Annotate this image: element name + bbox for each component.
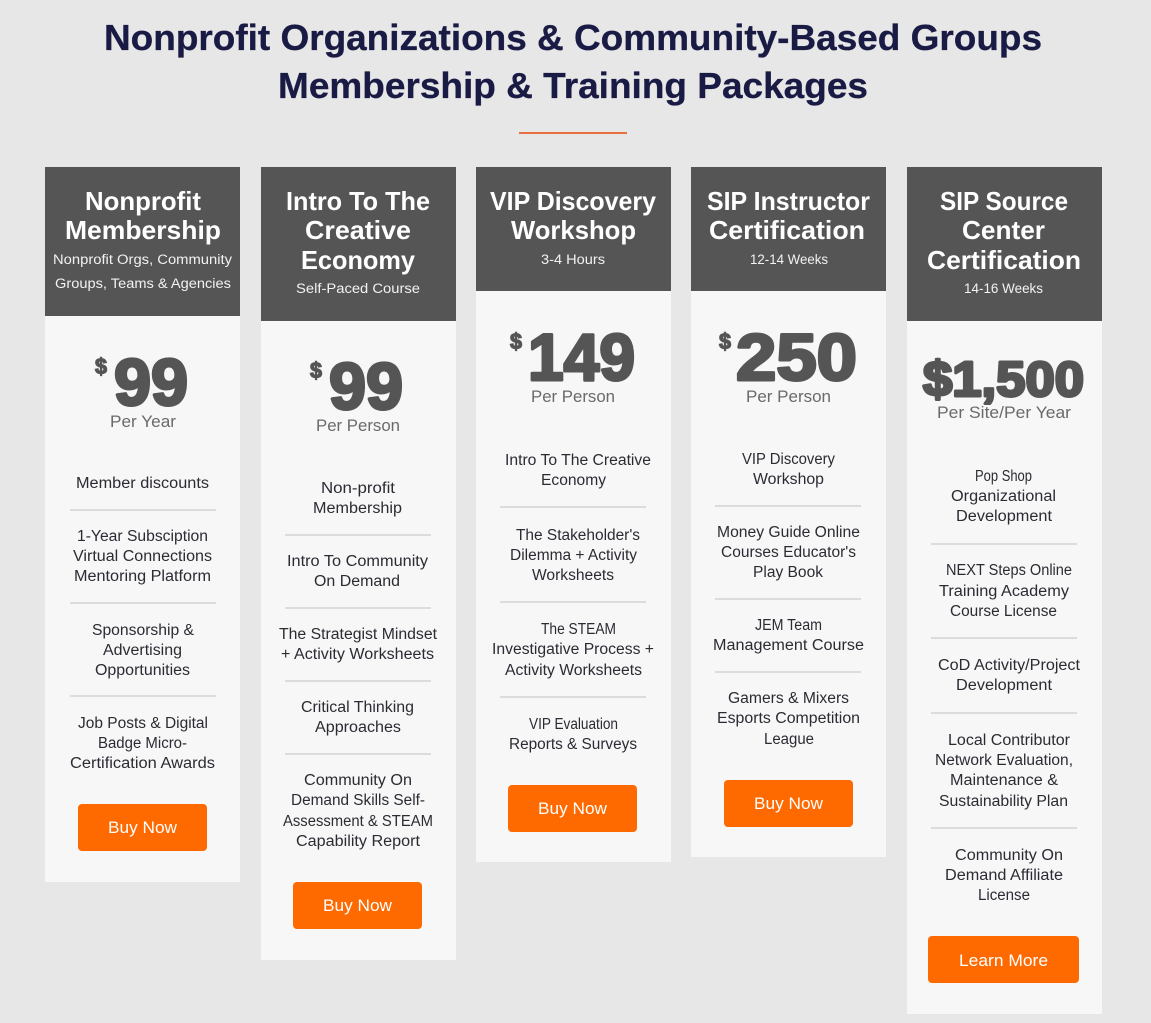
feature list: The Strategist Mindset [279,626,438,643]
feature list: Non-profit [321,480,396,497]
feature list: Local Contributor [948,732,1070,749]
feature list: Certification Awards [70,755,215,772]
header: VIP Discovery Workshop [476,167,671,291]
price: $99 per year: 99 [114,345,188,419]
panel: VIP Discovery Workshop [476,167,671,862]
header: SIP Instructor Certification: Certification [709,215,865,245]
title: Nonprofit Organizations & Community-Based Groups [104,17,1042,58]
feature list: CoD Activity/Project [938,657,1081,674]
header: SIP Instructor Certification [691,167,886,291]
feature list: Investigative Process + [492,641,654,658]
feature list: VIP Evaluation [529,716,618,733]
header: Intro To The Creative Economy [261,167,456,321]
header: SIP Source Center Certification: SIP Source [940,186,1068,216]
header: SIP Source Center Certification [907,167,1102,321]
header: Intro To The Creative Economy: Creative [305,215,411,245]
header: Nonprofit Membership: Groups, Teams & Agencies [55,276,231,291]
title: Membership & Training Packages [278,65,868,106]
feature list: Community On [955,847,1063,864]
price: $99 per person: 99 [329,349,403,423]
price: $149 per person: $ [510,329,522,354]
header: SIP Source Center Certification: 14-16 Weeks [964,281,1043,296]
feature list: Badge Micro- [98,735,187,752]
feature list: Dilemma + Activity [510,547,637,564]
header: SIP Instructor Certification: SIP Instructor [707,186,870,216]
feature list: Workshop [753,471,824,488]
header: Intro To The Creative Economy: Intro To The [286,186,430,216]
button: Learn More [928,936,1079,983]
panel: SIP Source Center Certification [907,167,1102,1014]
feature list: Assessment & STEAM [283,813,433,830]
feature list: Membership [313,500,402,517]
feature list: Job Posts & Digital [78,715,208,732]
feature list: NEXT Steps Online [946,562,1072,579]
header: SIP Instructor Certification: 12-14 Weeks [750,252,828,267]
feature list: Maintenance & [950,772,1059,789]
feature list: Play Book [753,564,823,581]
feature list: Organizational [951,488,1056,505]
feature list: Advertising [103,642,182,659]
price: $149 per person: Per Person [531,387,615,406]
price: $99 per person [310,349,403,435]
feature list: Intro To Community [287,553,428,570]
title [104,17,1042,106]
feature list: Intro To The Creative [505,452,651,469]
feature list: Critical Thinking [301,699,414,716]
feature list: The Stakeholder's [516,527,640,544]
feature list: Development [956,508,1053,525]
button: Buy Now: Buy Now [754,794,824,813]
button: Learn More: Learn More [959,951,1048,970]
header: Intro To The Creative Economy: Self-Paced Course [296,281,420,296]
feature list: Worksheets [532,567,614,584]
feature list [713,451,864,748]
button: Buy Now [724,780,853,827]
feature list: Reports & Surveys [509,736,637,753]
panel: SIP Instructor Certification [691,167,886,857]
header: Nonprofit Membership: Nonprofit [85,186,201,216]
feature list: Management Course [713,637,864,654]
feature list: Mentoring Platform [74,568,211,585]
feature list: Courses Educator's [721,544,856,561]
feature list: Pop Shop [975,468,1032,485]
header: VIP Discovery Workshop: VIP Discovery [490,186,657,216]
feature list: Network Evaluation, [935,752,1073,769]
feature list: + Activity Worksheets [281,646,434,663]
price: $99 per year: $ [95,354,107,379]
feature list: Esports Competition [717,710,860,727]
feature list: Capability Report [296,833,421,850]
price: $99 per year: Per Year [110,412,176,431]
button: Buy Now [293,882,422,929]
feature list: Gamers & Mixers [728,690,849,707]
feature list [492,452,654,753]
button: Buy Now: Buy Now [538,799,608,818]
feature list: Opportunities [95,662,190,679]
feature list: Approaches [315,719,401,736]
header: Nonprofit Membership [45,167,240,316]
price: $149 per person: 149 [528,320,635,394]
feature list: Demand Skills Self- [291,792,425,809]
feature list: Sponsorship & [92,622,195,639]
header: VIP Discovery Workshop: 3-4 Hours [541,252,605,267]
price: $250 per person: 250 [736,320,857,394]
header: Nonprofit Membership: Membership [65,215,221,245]
feature list: League [764,731,814,748]
feature list [931,468,1081,904]
price: $99 per person: Per Person [316,416,400,435]
feature list: Member discounts [76,475,209,492]
price: $250 per person: $ [719,329,731,354]
feature list: Demand Affiliate [945,867,1063,884]
feature list: On Demand [314,573,400,590]
header: SIP Source Center Certification: Certification [927,245,1081,275]
button: Buy Now: Buy Now [323,896,393,915]
feature list [70,475,216,772]
feature list: JEM Team [755,617,822,634]
feature list: License [978,887,1030,904]
feature list [279,480,438,850]
feature list: Economy [541,472,606,489]
price: $1,500 per site per year: Per Site/Per Year [937,403,1071,422]
feature list: The STEAM [541,621,616,638]
feature list: Virtual Connections [73,548,212,565]
feature list: 1-Year Subsciption [77,528,208,545]
feature list: Development [956,677,1053,694]
button: Buy Now [78,804,207,851]
feature list: Activity Worksheets [505,662,642,679]
header: Intro To The Creative Economy: Economy [301,245,416,275]
feature list: Money Guide Online [717,524,860,541]
button: Buy Now [508,785,637,832]
panel: Intro To The Creative Economy [261,167,456,960]
feature list: Community On [304,772,412,789]
price: $1,500 per site per year: $1,500 [923,353,1084,407]
price: $250 per person [719,320,857,406]
price: $250 per person: Per Person [746,387,831,406]
header: Nonprofit Membership: Nonprofit Orgs, Community [53,252,232,267]
header: VIP Discovery Workshop: Workshop [511,215,636,245]
feature list: Sustainability Plan [939,793,1068,810]
feature list: VIP Discovery [742,451,835,468]
button: Buy Now: Buy Now [108,818,178,837]
feature list: Training Academy [939,583,1069,600]
price: $99 per year [95,345,188,431]
panel: Nonprofit Membership [45,167,240,882]
price: $99 per person: $ [310,358,322,383]
feature list: Course License [950,603,1057,620]
header: SIP Source Center Certification: Center [962,215,1045,245]
